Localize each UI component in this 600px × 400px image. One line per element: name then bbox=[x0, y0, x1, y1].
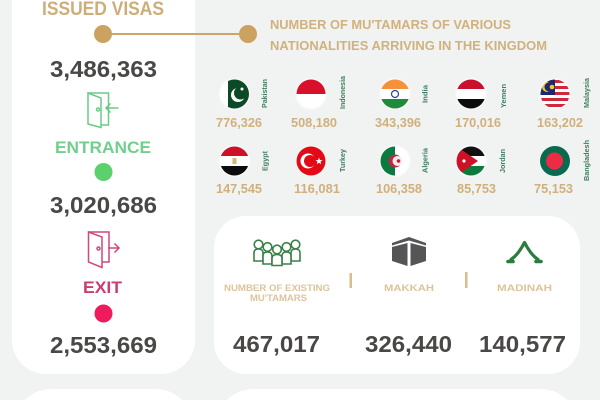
flag item: Pakistan bbox=[216, 78, 269, 130]
flag item: Indonesia: Indonesia bbox=[338, 75, 347, 109]
flag item: Egypt: 147,545 bbox=[216, 182, 262, 196]
flag item: Bangladesh bbox=[534, 140, 591, 196]
flag item: Pakistan: 776,326 bbox=[216, 116, 262, 130]
entrance total: 3,020,686 bbox=[50, 192, 157, 218]
flag item: Turkey bbox=[294, 146, 347, 196]
label: exit: EXIT bbox=[83, 278, 123, 297]
flag item: Malaysia bbox=[537, 77, 591, 130]
flag item: Bangladesh: 75,153 bbox=[534, 182, 573, 196]
icon: group of people bbox=[254, 240, 300, 266]
flag item: India: India bbox=[420, 84, 430, 103]
label: number of existing mu'tamars: NUMBER OF EXISTING bbox=[224, 283, 330, 294]
label: madinah: MADINAH bbox=[497, 283, 552, 294]
flag item: Yemen: Yemen bbox=[499, 84, 508, 108]
makkah total: 326,440 bbox=[365, 331, 452, 357]
panel: visas summary bbox=[12, 0, 195, 374]
flag item: Malaysia: Malaysia bbox=[582, 77, 591, 108]
icon: entrance door bbox=[88, 93, 118, 128]
flag item: Turkey: 116,081 bbox=[294, 182, 340, 196]
marker: exit dot bbox=[94, 304, 112, 322]
icon: kaaba bbox=[392, 237, 426, 266]
flag item: India bbox=[375, 78, 430, 130]
label: number of existing mu'tamars: MU'TAMARS bbox=[250, 293, 307, 304]
connector: visas to nationalities bbox=[94, 25, 257, 43]
issued visas total: 3,486,363 bbox=[50, 56, 157, 82]
panel: existing mu'tamars bbox=[214, 216, 580, 374]
marker: entrance dot bbox=[94, 163, 112, 181]
divider bbox=[350, 273, 352, 288]
flag item: Jordan: 85,753 bbox=[457, 182, 496, 196]
madinah total: 140,577 bbox=[479, 331, 566, 357]
icon: madinah mosque bbox=[508, 242, 541, 262]
flag item: Jordan bbox=[456, 146, 505, 195]
icon: exit door bbox=[88, 232, 119, 268]
heading: mu'tamars by nationality: NATIONALITIES ARRIVING IN THE KINGDOM bbox=[270, 39, 547, 53]
panel: lower right bbox=[227, 389, 567, 400]
flag item: Egypt: Egypt bbox=[260, 151, 270, 171]
flag item: India: 343,396 bbox=[375, 116, 421, 130]
flag item: Indonesia bbox=[291, 75, 347, 130]
heading: mu'tamars by nationality bbox=[270, 18, 547, 53]
flag item: Turkey: Turkey bbox=[338, 148, 347, 172]
flag item: Malaysia: 163,202 bbox=[537, 116, 583, 130]
heading: mu'tamars by nationality: NUMBER OF MU'TAMARS OF VARIOUS bbox=[270, 18, 511, 32]
flag item: Egypt bbox=[216, 145, 270, 196]
flag item: Algeria: Algeria bbox=[420, 147, 430, 173]
flag item: Indonesia: 508,180 bbox=[291, 116, 337, 130]
flag item: Yemen bbox=[455, 78, 508, 130]
label: entrance: ENTRANCE bbox=[55, 138, 151, 157]
exit total: 2,553,669 bbox=[50, 332, 157, 358]
label: makkah: MAKKAH bbox=[384, 283, 434, 294]
flag item: Jordan: Jordan bbox=[498, 149, 507, 173]
existing mu'tamars total: 467,017 bbox=[233, 331, 320, 357]
label: number of existing mu'tamars bbox=[224, 283, 330, 304]
flag item: Yemen: 170,016 bbox=[455, 116, 501, 130]
flag item: Bangladesh: Bangladesh bbox=[582, 140, 591, 181]
flag item: Pakistan: Pakistan bbox=[260, 79, 269, 108]
panel: lower left bbox=[25, 389, 182, 400]
divider bbox=[465, 272, 468, 288]
flag item: Algeria bbox=[376, 145, 430, 196]
flag item: Algeria: 106,358 bbox=[376, 182, 422, 196]
